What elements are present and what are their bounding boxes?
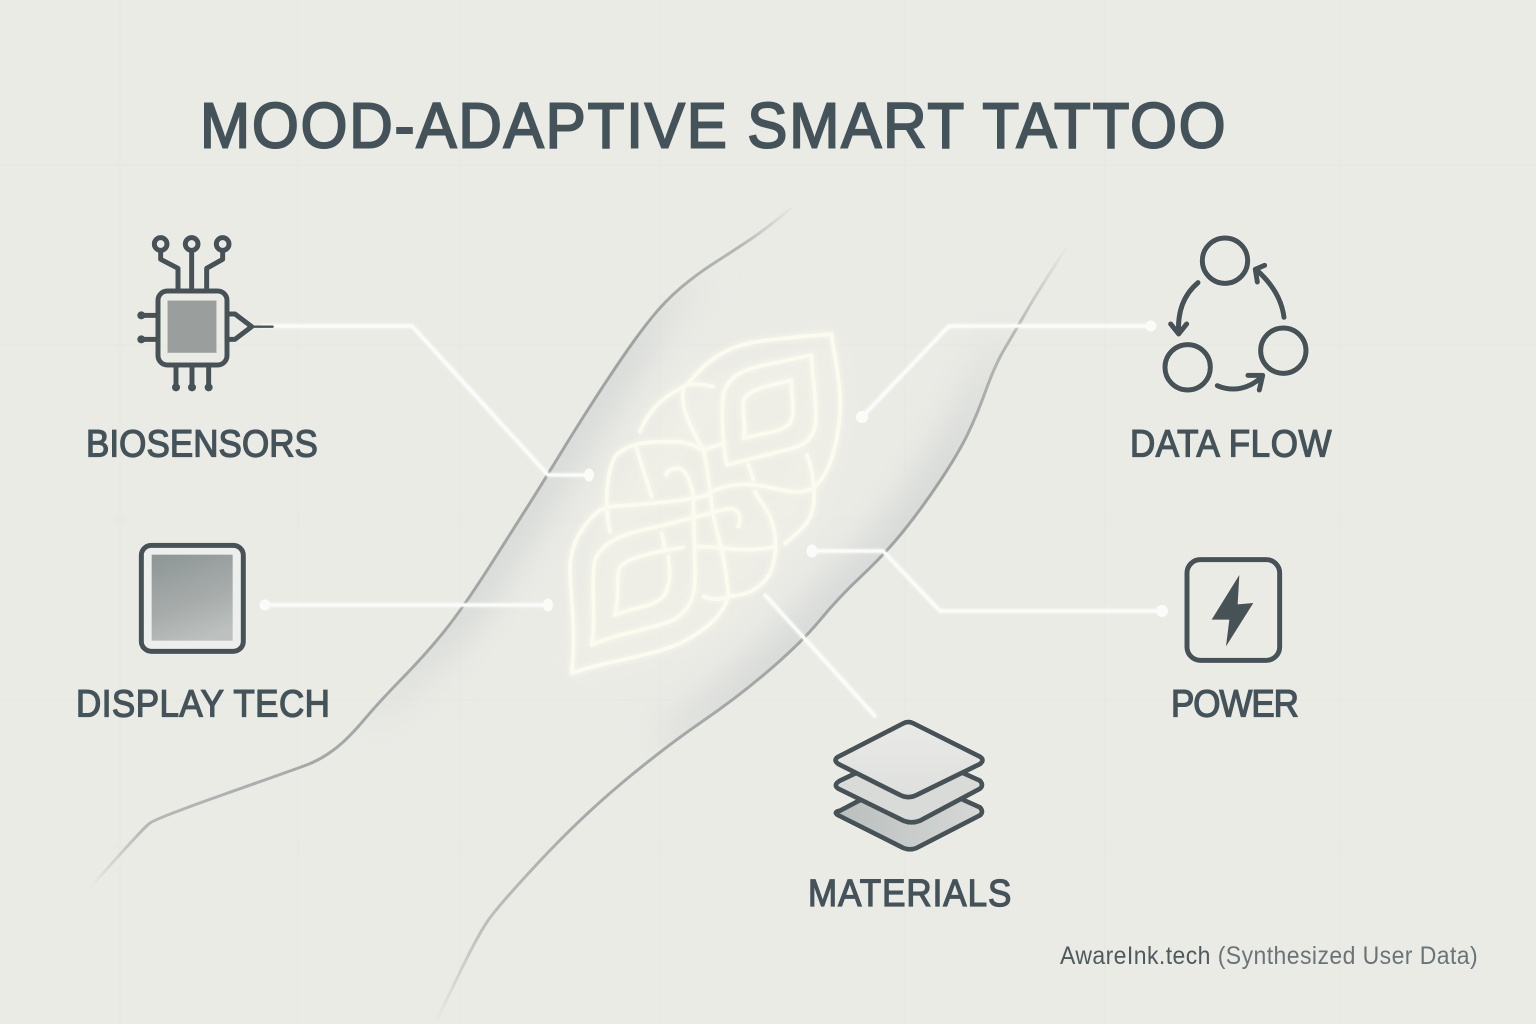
- connector: materials: [765, 595, 875, 716]
- connector: data flow: [856, 320, 1156, 423]
- tattoo glow: [572, 334, 840, 673]
- label: materials: MATERIALS: [808, 872, 1011, 914]
- source note: AwareInk.tech (Synthesized User Data): [1060, 942, 1478, 970]
- connector: display tech: [260, 598, 553, 612]
- icon: display tech: [141, 545, 243, 651]
- arm outline left: [90, 205, 795, 888]
- arm outline right: [432, 244, 1069, 1024]
- connector: power: [806, 544, 1168, 617]
- label: power: POWER: [1171, 682, 1299, 725]
- arm shading: [400, 300, 991, 736]
- label: data flow: DATA FLOW: [1130, 422, 1332, 465]
- label: biosensors: BIOSENSORS: [86, 422, 318, 465]
- arm illustration: [90, 205, 1069, 1024]
- icon: biosensor chip: [137, 238, 273, 391]
- label: display tech: DISPLAY TECH: [76, 682, 330, 725]
- connector: biosensors: [262, 326, 594, 482]
- glowing knot aura: [572, 334, 840, 673]
- icon: materials layers: [835, 722, 982, 849]
- icon: data flow cycle: [1165, 238, 1306, 390]
- title: MOOD-ADAPTIVE SMART TATTOO: [200, 91, 1226, 162]
- icon: power: [1187, 560, 1280, 660]
- tattoo knot pattern: [570, 334, 840, 673]
